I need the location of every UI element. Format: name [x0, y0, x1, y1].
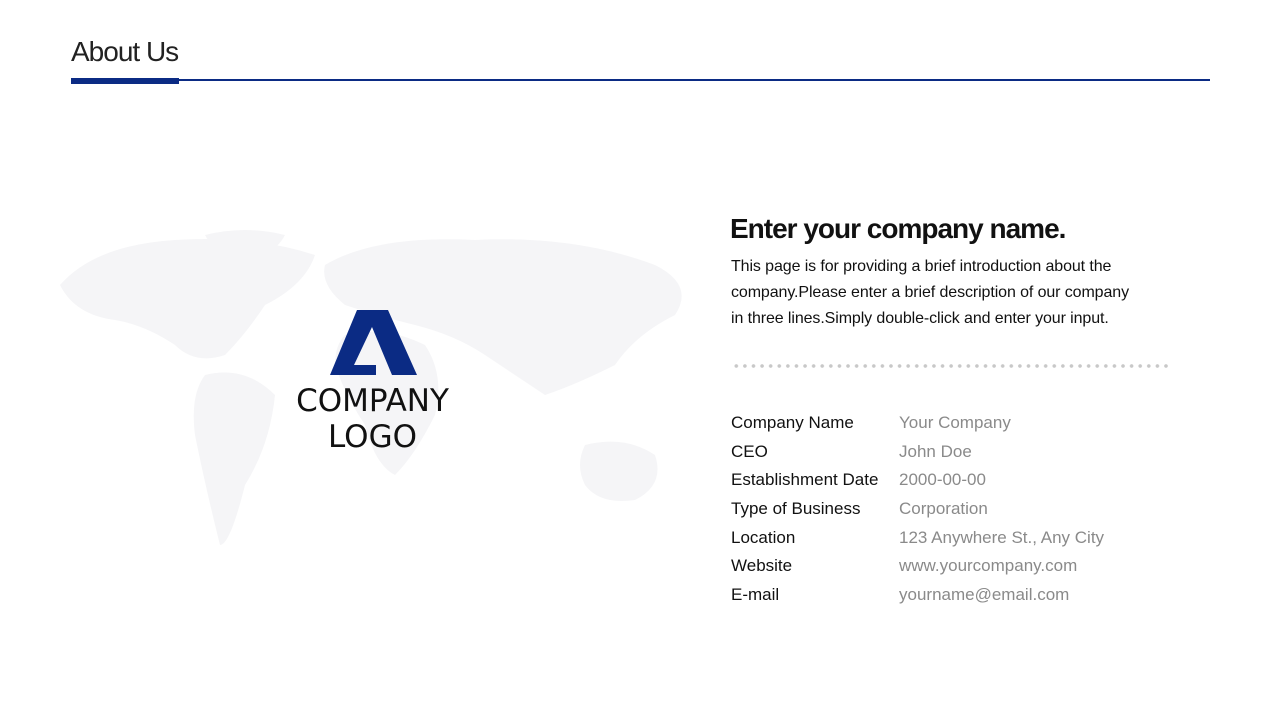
info table: Location: [731, 528, 795, 547]
dotted divider: [732, 364, 1172, 368]
info table: Company Name: [731, 413, 854, 432]
info table: CEO: [731, 442, 768, 461]
info table: 2000-00-00: [899, 470, 986, 489]
description: in three lines.Simply double-click and enter your input.: [731, 310, 1109, 327]
info table: www.yourcompany.com: [899, 556, 1077, 575]
info table: Establishment Date: [731, 470, 878, 489]
info table: Corporation: [899, 499, 988, 518]
world map background: [60, 230, 682, 545]
info table: John Doe: [899, 442, 972, 461]
description: [731, 258, 1130, 327]
title: About Us: [71, 36, 178, 67]
info table: Type of Business: [731, 499, 860, 518]
info table: 123 Anywhere St., Any City: [899, 528, 1104, 547]
description: company.Please enter a brief description of our company: [731, 284, 1129, 301]
info table: Website: [731, 556, 792, 575]
company logo: [296, 310, 449, 455]
logo text: [296, 383, 449, 455]
logo text: LOGO: [328, 419, 417, 455]
info table: E-mail: [731, 585, 779, 604]
icon: logo triangle: [330, 310, 417, 375]
description: This page is for providing a brief introduction about the: [731, 258, 1111, 275]
heading: Enter your company name.: [730, 213, 1065, 244]
logo text: COMPANY: [296, 383, 449, 419]
info table: Your Company: [899, 413, 1011, 432]
info table: yourname@email.com: [899, 585, 1069, 604]
title underline: [71, 78, 1210, 84]
